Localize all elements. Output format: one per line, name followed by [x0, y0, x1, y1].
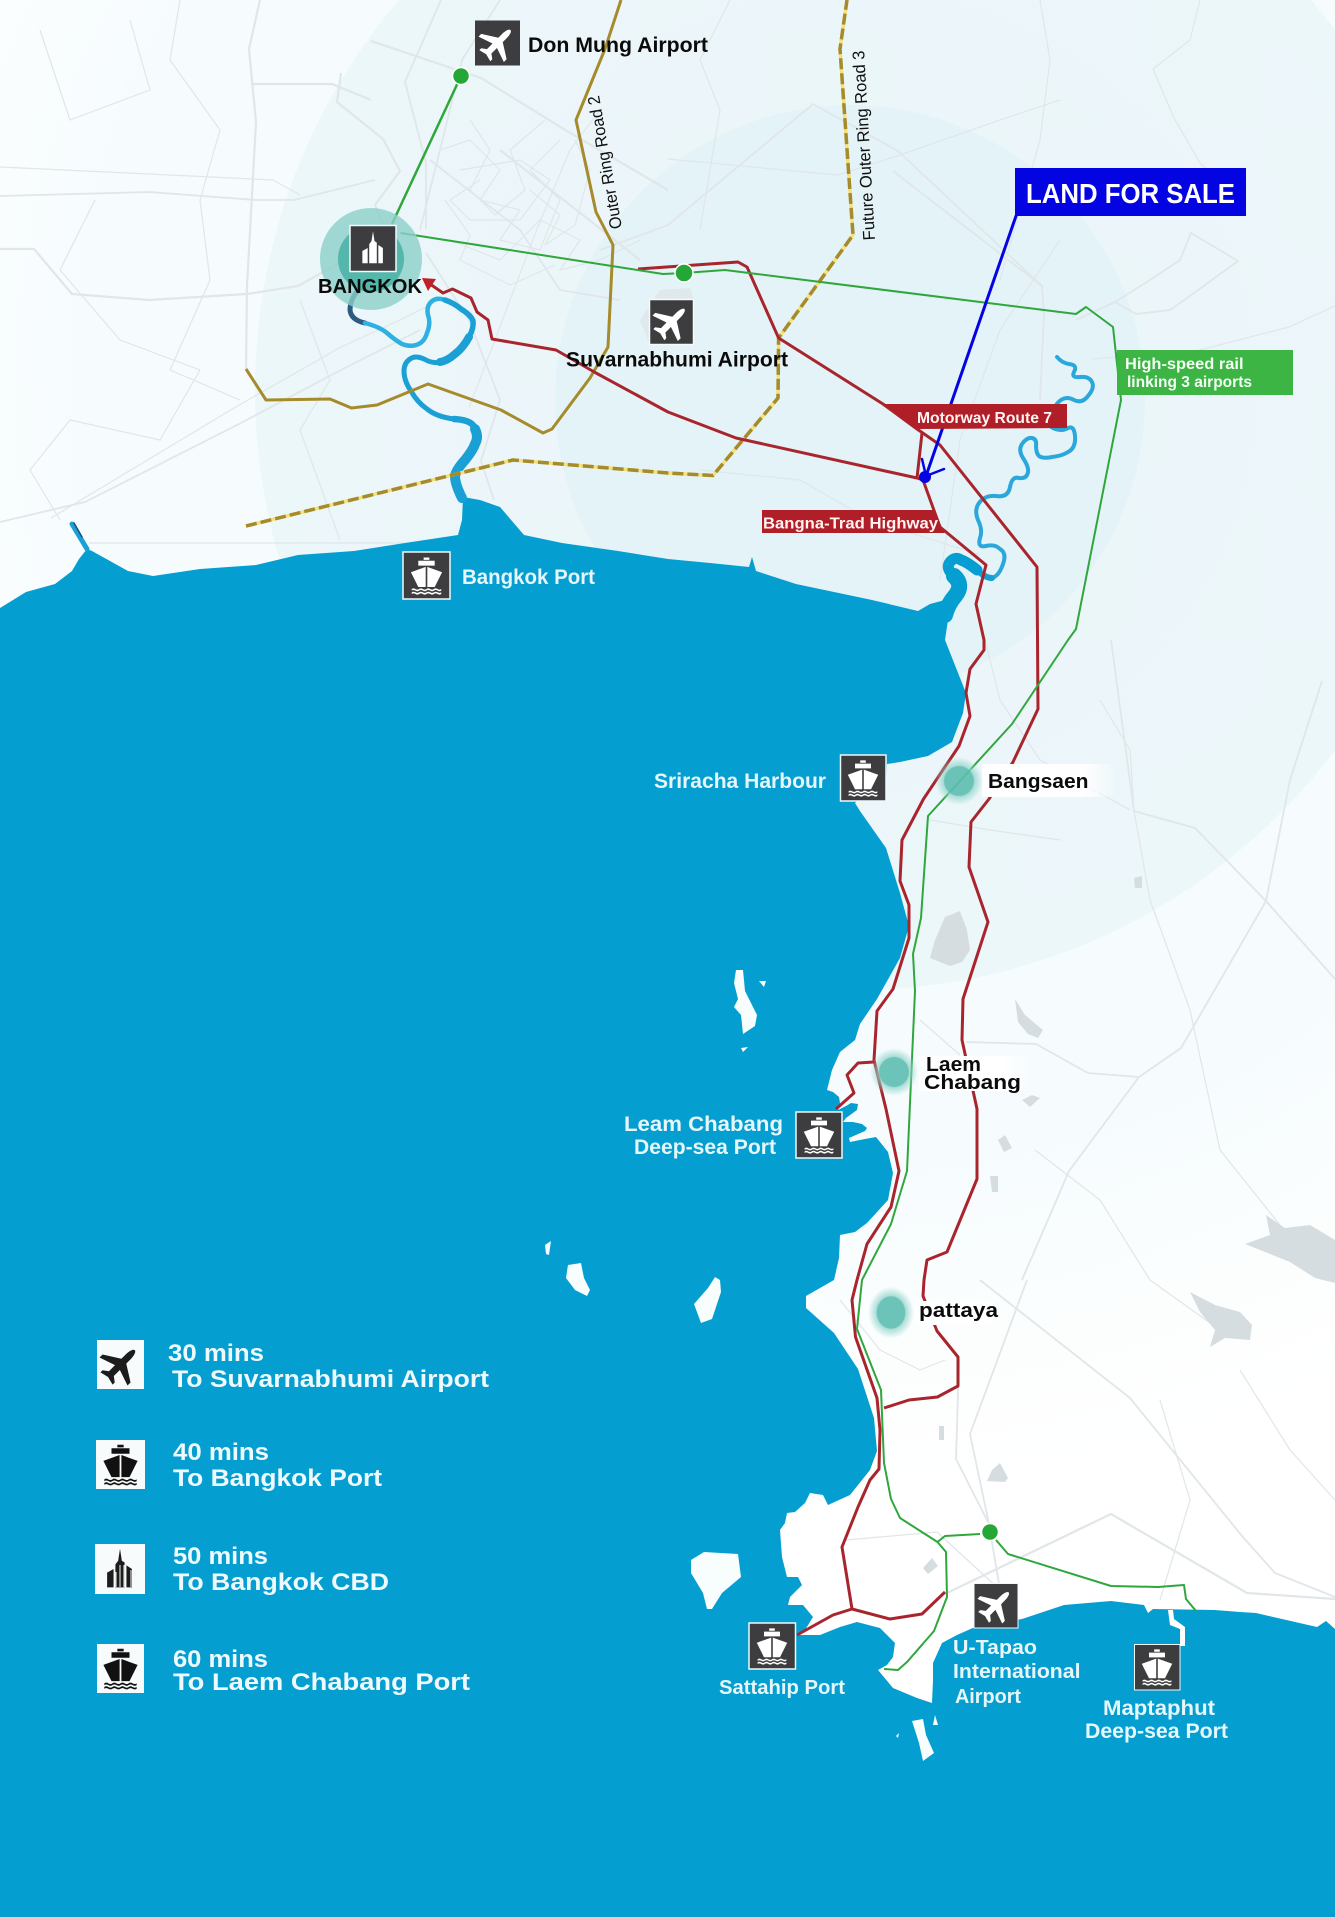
jetty: [1168, 1610, 1185, 1646]
river: Chao Phraya: [72, 290, 477, 549]
outer catchment circle: [255, 0, 1335, 990]
Pattaya city marker: pattaya: [919, 1300, 999, 1322]
Bangsaen city marker: [935, 757, 1117, 805]
legend row: 60 mins Laem Chabang Port: 60 mins: [173, 1646, 268, 1673]
station dots: [452, 68, 998, 1540]
river: Bang Pakong: [945, 357, 1093, 615]
label: high-speed rail: [1117, 350, 1293, 395]
Laem Chabang city marker: Chabang: [924, 1072, 1021, 1094]
U-Tapao International Airport marker: International: [953, 1661, 1080, 1683]
grey lakes: [640, 288, 1335, 1574]
Maptaphut Deep-sea Port marker: Deep-sea Port: [1085, 1720, 1228, 1743]
legend row: 50 mins Bangkok CBD: To Bangkok CBD: [173, 1569, 389, 1596]
Bangna-Trad coastal highway: [842, 478, 986, 1619]
legend row: 40 mins Bangkok Port: [96, 1439, 382, 1492]
Motorway Route 7: [638, 262, 1038, 1408]
Suvarnabhumi Airport marker: Suvarnabhumi Airport: [566, 348, 788, 372]
legend row: 60 mins Laem Chabang Port: [97, 1644, 470, 1696]
arrow: pointer to land plot: [920, 216, 1016, 482]
high-speed rail line: [392, 76, 1196, 1670]
label: high-speed rail: linking 3 airports: [1127, 374, 1252, 391]
legend row: 50 mins Bangkok CBD: 50 mins: [173, 1543, 268, 1570]
Leam Chabang Deep-sea Port marker: Deep-sea Port: [634, 1136, 776, 1159]
Sriracha Harbour marker: Sriracha Harbour: [654, 770, 826, 793]
Bangkok Port marker: Bangkok Port: [462, 566, 595, 589]
label: high-speed rail: High-speed rail: [1125, 356, 1244, 373]
arrow head at Bangkok: [422, 278, 436, 291]
Sriracha Harbour marker: [654, 755, 886, 801]
Laem Chabang branch: [836, 1062, 874, 1109]
red highways: [430, 262, 1038, 1635]
inner catchment circle: [555, 105, 1145, 695]
sea with coastline: [0, 497, 1335, 1917]
callout: Land for sale: LAND FOR SALE: [1026, 178, 1235, 209]
Laem Chabang city marker: Laem: [926, 1054, 981, 1076]
Laem Chabang city marker: [870, 1048, 1029, 1096]
Leam Chabang Deep-sea Port marker: [624, 1112, 842, 1159]
legend row: 40 mins Bangkok Port: 40 mins: [173, 1439, 269, 1466]
Bangkok hub: BANGKOK: [318, 276, 423, 298]
U-Tapao International Airport marker: [953, 1580, 1080, 1708]
Pattaya city marker: [868, 1286, 1005, 1338]
legend: travel times: [93, 1336, 489, 1696]
legend row: 30 mins Suvarnabhumi Airport: To Suvarnabhumi Airport: [172, 1366, 489, 1393]
Sattahip Port marker: [719, 1623, 845, 1699]
label: Motorway Route 7: Motorway Route 7: [917, 410, 1052, 427]
legend row: 30 mins Suvarnabhumi Airport: [93, 1336, 489, 1393]
U-Tapao International Airport marker: Airport: [955, 1686, 1021, 1708]
Bangsaen city marker: Bangsaen: [988, 771, 1088, 793]
label: Future Outer Ring Road 3: Future Outer Ring Road 3: [849, 50, 879, 241]
legend row: 50 mins Bangkok CBD: [95, 1543, 389, 1596]
label: Bangna-Trad Highway: [762, 510, 944, 533]
U-Tapao International Airport marker: U-Tapao: [953, 1637, 1037, 1659]
Bangkok hub: [318, 208, 423, 310]
legend row: 40 mins Bangkok Port: To Bangkok Port: [173, 1465, 382, 1492]
label: Bangna-Trad Highway: Bangna-Trad Highway: [763, 516, 938, 532]
label: Motorway Route 7: [883, 404, 1067, 429]
legend row: 30 mins Suvarnabhumi Airport: 30 mins: [168, 1340, 264, 1367]
highway to Bangkok: [430, 284, 922, 478]
Don Mung Airport marker: [472, 17, 708, 68]
Maptaphut Deep-sea Port marker: [1085, 1644, 1228, 1743]
Don Mung Airport marker: Don Mung Airport: [528, 34, 708, 57]
Leam Chabang Deep-sea Port marker: Leam Chabang: [624, 1113, 783, 1136]
Suvarnabhumi Airport marker: [566, 296, 788, 372]
Sattahip Port marker: Sattahip Port: [719, 1677, 845, 1699]
islands: [545, 970, 938, 1761]
Bangkok Port marker: [403, 552, 595, 599]
Sattahip branch: [797, 1609, 852, 1635]
label: Outer Ring Road 2: Outer Ring Road 2: [584, 94, 626, 231]
ring road: Outer Ring Road 2: [246, 0, 621, 433]
callout: Land for sale: [920, 168, 1246, 482]
Maptaphut Deep-sea Port marker: Maptaphut: [1103, 1697, 1215, 1720]
legend row: 60 mins Laem Chabang Port: To Laem Chabang Port: [173, 1669, 470, 1696]
ring road: Future Outer Ring Road 3 (dashed): [246, 0, 853, 526]
